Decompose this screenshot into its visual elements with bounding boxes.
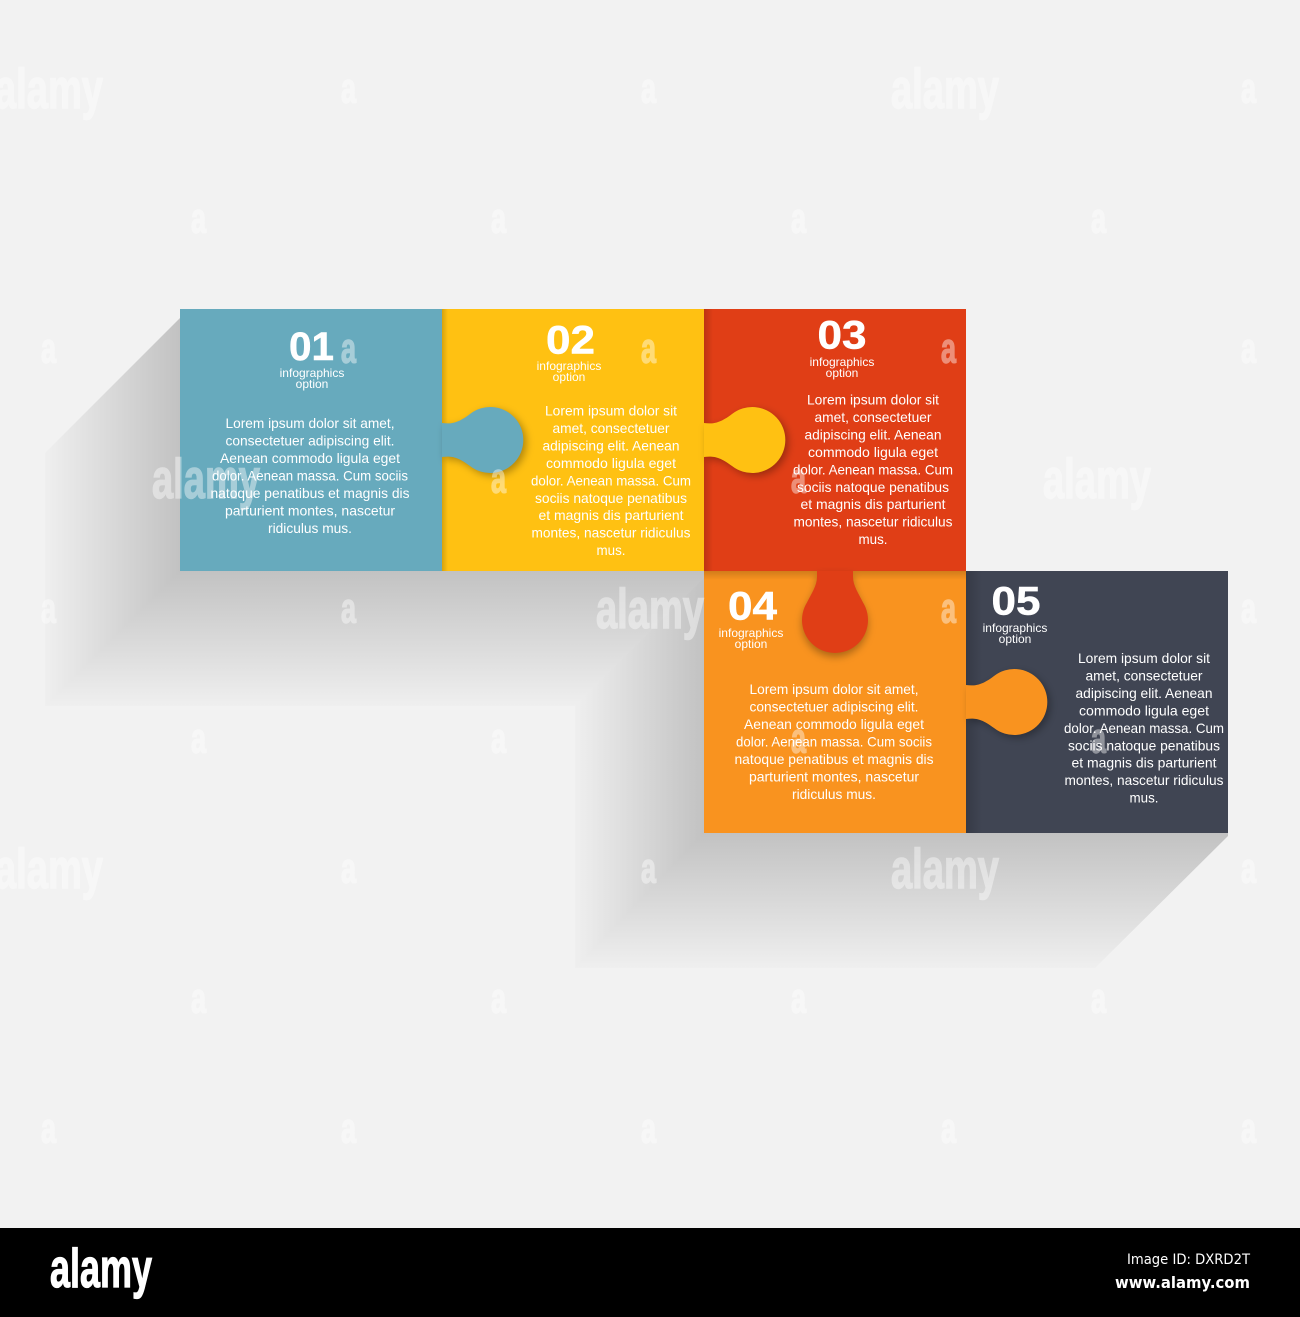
watermarks: a [341, 65, 356, 112]
text block 02: 02 [546, 318, 595, 362]
watermarks: a [1241, 585, 1256, 632]
watermarks: a [641, 845, 656, 892]
text block 05: et magnis dis parturient [1072, 756, 1217, 771]
watermarks: a [641, 1105, 656, 1152]
text block 03: amet, consectetuer [814, 410, 932, 425]
puzzle knob: red into orange [802, 571, 868, 657]
watermarks: a [791, 455, 806, 502]
text block 03: option [826, 366, 858, 380]
watermarks: a [41, 585, 56, 632]
text block 05: option [999, 632, 1031, 646]
watermarks: a [1091, 975, 1106, 1022]
panel 05: dark slate [966, 571, 1228, 833]
watermarks: a [191, 975, 206, 1022]
text block 05: sociis natoque penatibus [1068, 738, 1220, 753]
watermarks: alamy [1043, 447, 1151, 510]
text block 03: et magnis dis parturient [800, 497, 946, 512]
panel 01: blue [180, 309, 442, 571]
watermarks: a [1241, 845, 1256, 892]
text block 04: option [735, 637, 767, 651]
watermarks: alamy [596, 577, 704, 640]
text block 03 [793, 314, 953, 547]
text block 04: Aenean commodo ligula eget [744, 717, 924, 732]
text block 04: dolor. Aenean massa. Cum sociis [736, 734, 932, 749]
puzzle knob: blue into yellow [442, 407, 526, 476]
text block 01: consectetuer adipiscing elit. [226, 434, 394, 448]
text block 03: sociis natoque penatibus [797, 480, 949, 495]
text block 03: dolor. Aenean massa. Cum [793, 462, 953, 477]
text block 05: montes, nascetur ridiculus [1064, 773, 1224, 788]
text block 05: mus. [1130, 791, 1158, 806]
watermarks: a [641, 65, 656, 112]
text block 05: adipiscing elit. Aenean [1076, 686, 1212, 701]
watermarks: a [341, 325, 356, 372]
watermarks: a [41, 325, 56, 372]
watermarks: a [791, 975, 806, 1022]
text block 02: infographics [537, 359, 601, 373]
watermarks: a [1241, 325, 1256, 372]
text block 02: et magnis dis parturient [538, 508, 684, 523]
watermarks: a [1091, 195, 1106, 242]
watermarks: a [491, 455, 506, 502]
text block 01: natoque penatibus et magnis dis [210, 486, 410, 501]
text block 05: infographics [983, 621, 1047, 635]
text block 01: infographics [280, 366, 344, 380]
text block 01: Aenean commodo ligula eget [220, 451, 400, 466]
text block 05 [983, 580, 1224, 806]
watermarks: a [191, 195, 206, 242]
text block 03: 03 [818, 314, 866, 358]
text block 02: sociis natoque penatibus [535, 491, 687, 506]
puzzle knob: yellow into red [704, 407, 788, 476]
text block 01: ridiculus mus. [268, 521, 352, 536]
text block 04: consectetuer adipiscing elit. [750, 700, 918, 714]
footer bar [0, 1228, 1300, 1317]
watermarks: a [341, 845, 356, 892]
watermarks: a [341, 585, 356, 632]
text block 03: commodo ligula eget [808, 445, 938, 460]
watermarks: alamy [152, 447, 260, 510]
text block 03: infographics [810, 355, 874, 369]
text block 05: amet, consectetuer [1086, 668, 1203, 684]
watermarks: a [1241, 65, 1256, 112]
watermarks: a [341, 1105, 356, 1152]
watermarks: a [941, 1105, 956, 1152]
panel 04: orange [704, 571, 966, 833]
watermarks: a [491, 195, 506, 242]
text block 02: amet, consectetuer [552, 421, 670, 436]
text block 05: commodo ligula eget [1079, 703, 1209, 718]
text block 01: Lorem ipsum dolor sit amet, [226, 416, 394, 431]
watermarks: a [941, 585, 956, 632]
text block 04: infographics [719, 626, 783, 640]
text block 03: montes, nascetur ridiculus [794, 515, 953, 530]
text block 04 [719, 584, 934, 802]
watermarks: a [791, 715, 806, 762]
footer logo: alamy [50, 1237, 152, 1299]
text block 01: option [296, 377, 328, 391]
text block 02: montes, nascetur ridiculus [532, 526, 691, 541]
text block 04: natoque penatibus et magnis dis [734, 752, 934, 767]
watermarks: a [941, 325, 956, 372]
text block 05: dolor. Aenean massa. Cum [1064, 721, 1224, 736]
text block 02: Lorem ipsum dolor sit [545, 404, 677, 418]
text block 03: mus. [858, 532, 888, 547]
text block 03: Lorem ipsum dolor sit [807, 392, 939, 408]
long drop shadows [45, 318, 1228, 968]
text block 01 [210, 325, 410, 536]
watermarks: a [191, 715, 206, 762]
text block 02: adipiscing elit. Aenean [542, 438, 680, 453]
watermarks: a [41, 1105, 56, 1152]
panel 03: red [704, 309, 966, 571]
text block 05: 05 [992, 580, 1040, 624]
website: www.alamy.com [1115, 1273, 1250, 1292]
text block 02: commodo ligula eget [546, 456, 676, 471]
text block 01: dolor. Aenean massa. Cum sociis [212, 468, 408, 483]
watermarks: a [491, 715, 506, 762]
text block 02 [531, 318, 691, 558]
text block 04: Lorem ipsum dolor sit amet, [750, 682, 918, 697]
watermarks: a [641, 325, 656, 372]
watermarks: alamy [891, 57, 999, 120]
text block 04: parturient montes, nascetur [749, 769, 919, 784]
text block 04: 04 [728, 584, 778, 628]
image id: Image ID: DXRD2T [1127, 1252, 1250, 1268]
text block 01: 01 [289, 325, 334, 369]
watermarks: a [1091, 715, 1106, 762]
panel 02: yellow [442, 309, 704, 571]
watermarks: a [491, 975, 506, 1022]
text block 01: parturient montes, nascetur [225, 503, 395, 518]
watermarks: a [791, 195, 806, 242]
text block 03: adipiscing elit. Aenean [804, 427, 942, 442]
text block 02: mus. [596, 543, 626, 558]
text block 05: Lorem ipsum dolor sit [1078, 651, 1210, 666]
watermarks: a [1241, 1105, 1256, 1152]
watermarks: alamy [891, 837, 999, 900]
text block 04: ridiculus mus. [792, 787, 876, 802]
puzzle knob: orange into dark [966, 669, 1050, 738]
text block 02: option [553, 370, 585, 384]
text block 02: dolor. Aenean massa. Cum [531, 473, 691, 488]
